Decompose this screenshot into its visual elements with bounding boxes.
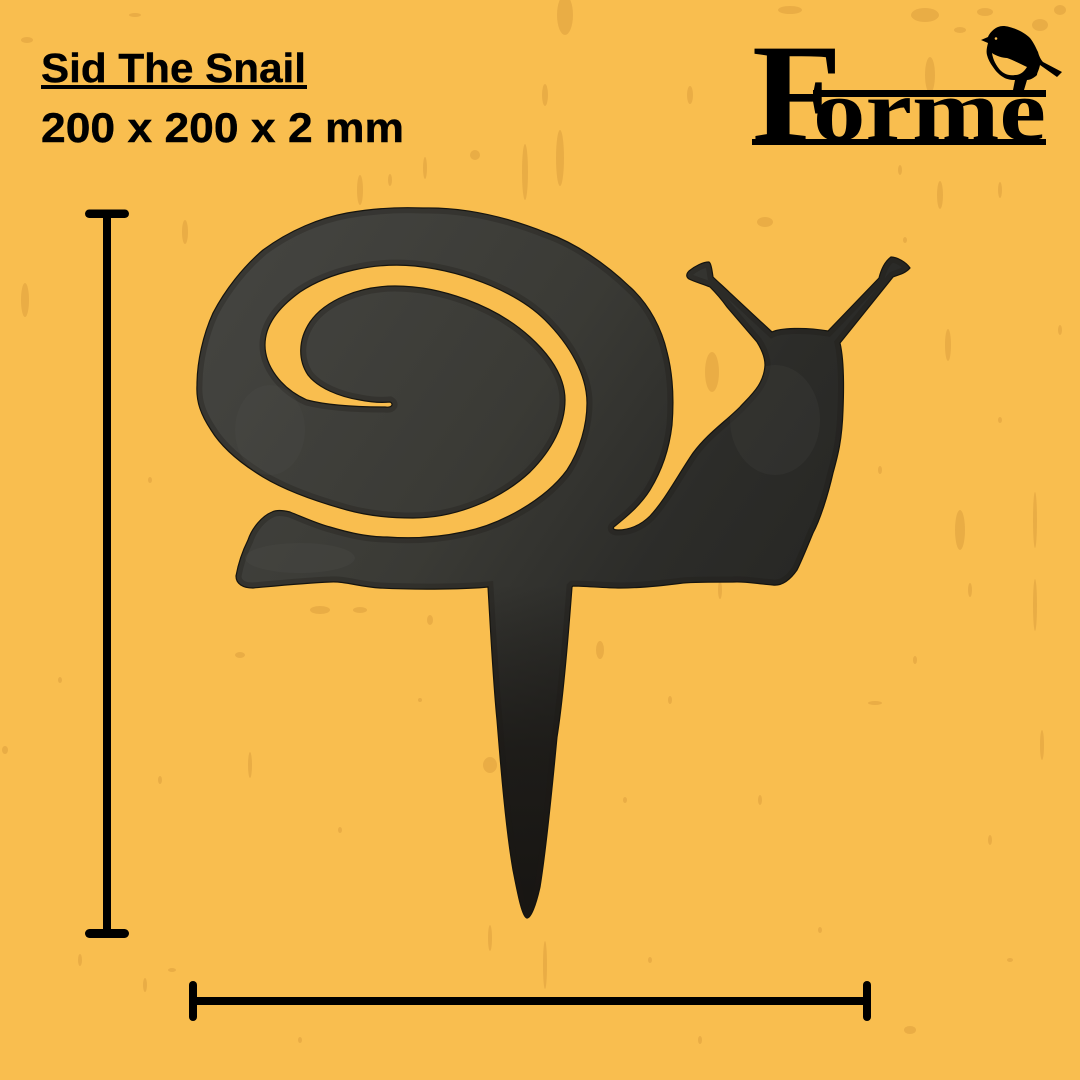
logo letters orme: orme (813, 63, 1046, 160)
height dimension bar (85, 210, 129, 938)
heading: product name: Sid The Snail (41, 45, 306, 91)
width dimension bar (189, 981, 871, 1021)
logo letter F: F (752, 16, 842, 172)
snail garden stake silhouette (197, 208, 910, 925)
icon: robin (981, 26, 1062, 90)
text: dimensions: 200 x 200 x 2 mm (41, 104, 404, 151)
logo bars (752, 90, 1046, 145)
logo: Forme (752, 16, 1062, 172)
